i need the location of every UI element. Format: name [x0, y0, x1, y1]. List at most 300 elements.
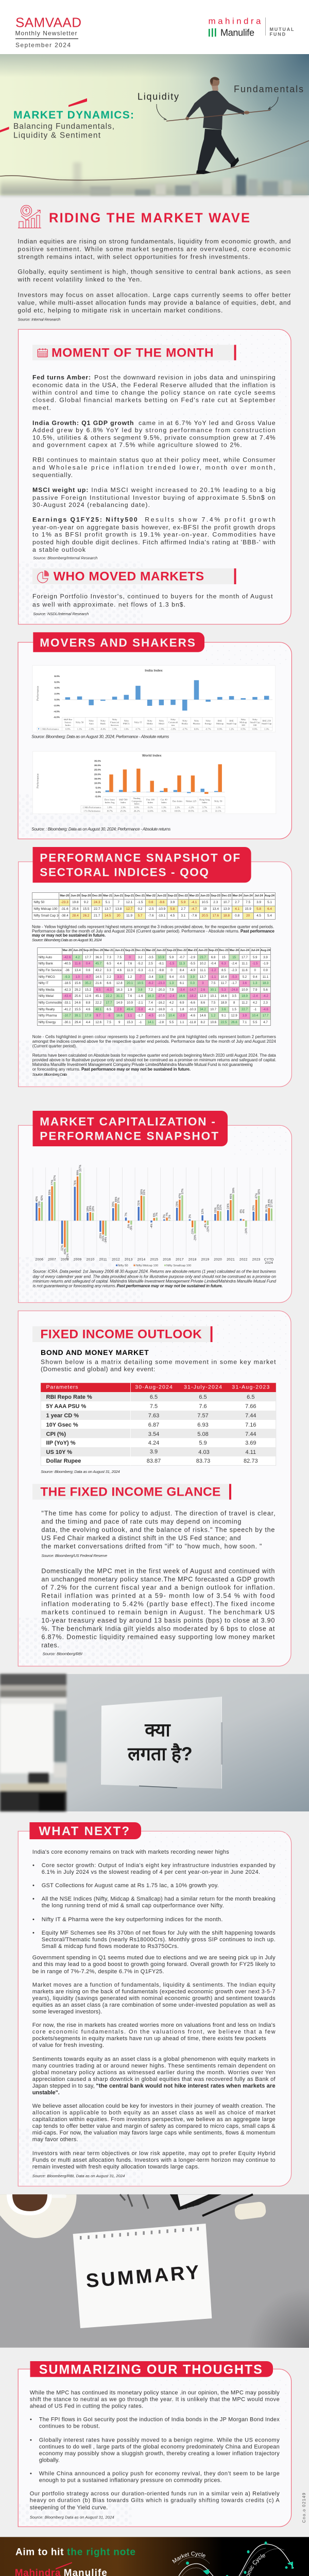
table: sectoral index quarterly returns: 1.3 — [253, 981, 257, 985]
table: sectoral index quarterly returns: Nifty IT — [39, 981, 48, 985]
table: sectoral index quarterly returns: -42.3 — [63, 988, 71, 992]
table: sectoral index quarterly returns: Nifty Auto — [39, 956, 52, 959]
data table: India Index: -1.9% — [89, 727, 94, 731]
table: nifty 50, midcap and smallcap quarterly returns: 2.7 — [235, 901, 239, 904]
bar chart: yearly returns by market cap: -31% — [102, 1235, 105, 1242]
table: nifty 50, midcap and smallcap quarterly returns: Nifty Midcap 100 — [33, 907, 57, 911]
value labels: 77% — [51, 1180, 54, 1185]
table: nifty 50, midcap and smallcap quarterly returns: Sep-20 — [81, 894, 91, 897]
text: india core economy bullets: • — [32, 1917, 35, 1923]
table: nifty 50, midcap and smallcap quarterly returns: Jun-21 — [114, 894, 123, 897]
tab heading: movers and shakers — [33, 632, 204, 652]
table: sectoral index quarterly returns: 5.3 — [221, 988, 226, 992]
table: sectoral index quarterly returns: -18.2 — [189, 994, 196, 998]
icon: pie chart — [38, 570, 49, 583]
table: nifty 50, midcap and smallcap quarterly returns: Jun-24 — [244, 894, 253, 897]
data table: India Index: Nifty — [89, 719, 94, 722]
data table: World Index: Ftse 100 — [146, 799, 155, 801]
table: sectoral index quarterly returns: -3.4 — [179, 988, 185, 992]
year axis: 2012 — [112, 1258, 120, 1262]
year axis: 2010 — [86, 1258, 94, 1262]
legend — [116, 1264, 191, 1267]
value labels: 59% — [232, 1188, 235, 1193]
table: nifty 50, midcap and smallcap quarterly returns: Dec-22 — [179, 894, 188, 897]
table: nifty 50, midcap and smallcap quarterly returns: 7 — [117, 901, 119, 904]
data table: World Index: 0.1% — [148, 806, 153, 808]
panel: performance snapshot of sectoral indices — [19, 847, 291, 1087]
bar chart: yearly returns by market cap: -15% — [192, 1228, 195, 1235]
data table: India Index: 1.2% — [229, 727, 234, 731]
value labels: 40% — [36, 1196, 39, 1202]
table: sectoral index quarterly returns: -5.3 — [138, 969, 143, 972]
table: nifty 50, midcap and smallcap quarterly returns: Mar-24 — [233, 894, 242, 897]
text: domestic MPC commentary: of 7.2% for the current fiscal year and a benign outlook for inflation. — [41, 1584, 275, 1591]
text: market overview: strength remains intact, with select opportunities for fresh investments. — [18, 253, 250, 261]
year axis: 2022 — [239, 1258, 248, 1262]
text: MPC opinion: While the MPC has continued its monetary policy stance .in our opinion, the MPC may possibly — [30, 2389, 280, 2396]
text: investor guidance — [32, 2150, 276, 2178]
table: sectoral index quarterly returns: -5.5 — [190, 962, 195, 965]
value labels: 24% — [227, 1204, 230, 1209]
table: sectoral index quarterly returns: 3.3 — [117, 975, 122, 979]
table: sectoral index quarterly returns: 2.6 — [201, 988, 205, 992]
bar chart: yearly returns by market cap: -4% — [150, 1224, 153, 1228]
text: market moves: Market moves are a function of fundamentals, liquidity & sentiments. The Indian equity — [32, 1982, 276, 1988]
table: sectoral index quarterly returns: 3.6 — [243, 981, 247, 985]
text: valuations: pockets/segments in equity markets have run up ahead of time, there exists few pockets — [32, 2036, 266, 2042]
note: yellow highlighted cells: may or may not be sustained in future. — [32, 933, 106, 938]
table: sectoral index quarterly returns: -41.2 — [63, 1008, 71, 1011]
value labels: 18% — [87, 1206, 90, 1212]
data table: India Index: Media — [147, 722, 153, 725]
table: sectoral index quarterly returns: 3.2 — [138, 956, 143, 959]
table: sectoral index quarterly returns: 18.9 — [220, 1001, 227, 1005]
table: sectoral index quarterly returns: 16.6 — [220, 994, 227, 998]
table: nifty 50, midcap and smallcap quarterly returns: 4.5 — [256, 914, 261, 918]
text: fed chair quote: and the timing and pace of rate cuts may depend on incoming — [41, 1518, 241, 1526]
text: foreign portfolio investors: Foreign Portfolio Investor's, continued to buyers for the month of August — [32, 593, 273, 600]
tab heading: what next: WHAT NEXT? — [39, 1824, 129, 1838]
data table: World Index: 12.6% — [147, 809, 153, 812]
table: nifty 50, midcap and smallcap quarterly returns: 13.9 — [223, 907, 230, 911]
value labels: 4% — [239, 1209, 243, 1213]
text: market moves: some leveraged investors). — [32, 2009, 102, 2015]
text: market overview: gold etc, helping to mitigate risk in uncertain market conditions. — [18, 307, 222, 314]
table: sectoral index quarterly returns: 12.6 — [85, 994, 91, 998]
value labels: 47% — [179, 1193, 182, 1199]
table: sectoral index quarterly returns: Nifty Bank — [39, 962, 53, 965]
table: sectoral index quarterly returns: Nifty Energy — [39, 1021, 56, 1024]
data table: India Index: Nifty 50 — [76, 721, 84, 723]
hero subtitle — [13, 122, 114, 140]
table: key market parameters: 5.9 — [199, 1440, 207, 1446]
bar chart: yearly returns by market cap: -29% — [194, 1234, 197, 1241]
note: green and pink cells: Past performance may or may not be sustained in future. — [81, 1067, 191, 1072]
table: sectoral index quarterly returns: 5.9 — [253, 956, 257, 959]
table: nifty 50, midcap and smallcap quarterly returns: 4.1 — [235, 907, 239, 911]
table: nifty 50, midcap and smallcap quarterly returns: 4.5 — [170, 914, 175, 918]
table: sectoral index quarterly returns: 6.3 — [221, 962, 226, 965]
data table: India Index: Services — [111, 724, 119, 726]
text: india growth: India Growth: Q1 GDP growth — [32, 419, 134, 427]
note: green and pink cells — [32, 1035, 276, 1077]
icon: calendar — [38, 348, 47, 357]
bar chart: World Index: 15.0% — [94, 777, 101, 780]
legend: Nifty Smallcap 100 — [166, 1264, 191, 1267]
table: nifty 50, midcap and smallcap quarterly returns: 26.2 — [83, 914, 90, 918]
value labels: 20% — [252, 1205, 255, 1211]
table: sectoral index quarterly returns: 9.4 — [169, 975, 174, 979]
value labels: 3% — [163, 1214, 166, 1218]
table: sectoral index quarterly returns: 5.5 — [169, 1021, 174, 1024]
table: sectoral index quarterly returns: 6.6 — [107, 981, 111, 985]
text: RBI: RBI continues to maintain status quo at their policy meet, while Consumer — [32, 456, 276, 464]
table: nifty 50, midcap and smallcap quarterly returns: Dec-21 — [135, 894, 145, 897]
table: sectoral index quarterly returns: -42.6 — [63, 956, 71, 959]
text: earnings: Results show 7.4% profit growth — [145, 516, 276, 523]
table: sectoral index quarterly returns: 10.4 — [252, 1014, 258, 1018]
text: market overview: Globally, equity sentiment is high, though sensitive to central bank actions, as seen — [18, 268, 290, 276]
table: sectoral index quarterly returns: 18.3 — [263, 981, 268, 985]
value labels: 15% — [214, 1207, 217, 1213]
data table: India Index: Pharma — [193, 722, 200, 725]
data table: India Index: Financial — [110, 721, 119, 723]
table: sectoral index quarterly returns: 22.2 — [95, 1001, 101, 1005]
table: nifty 50, midcap and smallcap quarterly returns: 20 — [117, 914, 121, 918]
table: sectoral index quarterly returns: -0.4 — [211, 962, 216, 965]
sign text: क्या — [144, 1719, 171, 1740]
table: nifty 50, midcap and smallcap quarterly returns: 2.3 — [213, 901, 218, 904]
data table: India Index: -2.1% — [147, 727, 152, 731]
table: key market parameters: 7.5 — [150, 1403, 158, 1410]
table: sectoral index quarterly returns: 8 — [233, 1001, 235, 1005]
text: market moves: markets are rising on the back of fundamentals (expected economic growth over next 3-5-7 — [32, 1989, 276, 1995]
data table: World Index: Dax Index — [173, 800, 183, 802]
text: fed turns amber: Post the downward revision in jobs data and uninspiring — [94, 374, 276, 381]
bar chart: yearly returns by market cap: -60% — [64, 1248, 67, 1255]
table: sectoral index quarterly returns: 3.5 — [232, 994, 236, 998]
text: india core economy bullets: All the NSE Indices (Nifty, Midcap & Smallcap) had a similar return for the month breaking — [42, 1896, 276, 1902]
source note: day of every calendrer year end. The data provided above is for illustrative purpose only and should not be construed as a promise on — [33, 1275, 276, 1279]
value labels: 46% — [230, 1193, 233, 1199]
data table: India Index: Midcap — [216, 722, 224, 725]
panel: fixed income outlook — [18, 1311, 291, 1666]
text: asset allocation: mid-caps. For now, the valuation may favors large caps while sentiments, flows & momentum — [32, 2130, 276, 2136]
legend: Nifty 50 — [118, 1264, 128, 1267]
table: sectoral index quarterly returns: 17.7 — [242, 956, 248, 959]
source note: Past performance may or may not be sustained in future. — [117, 1284, 222, 1289]
table: sectoral index quarterly returns: Jul-24 — [251, 949, 259, 952]
text: asset allocation: cap tends to offer better value and margin of safety as compared to micro caps, small caps & — [32, 2123, 276, 2129]
table: key market parameters: 3.9 — [150, 1449, 158, 1455]
table: sectoral index quarterly returns: 3 — [202, 981, 204, 985]
table: nifty 50, midcap and smallcap quarterly returns: 7.5 — [246, 901, 250, 904]
table: nifty 50, midcap and smallcap quarterly returns: -9.6 — [159, 901, 164, 904]
text: domestic MPC commentary: an unchanged monetary policy stance.The MPC forecasted a GDP growth — [41, 1576, 274, 1583]
panel: what next — [18, 1822, 291, 2186]
data table: India Index: Nifty — [252, 718, 258, 721]
text: market moves: equities as an asset class (a rare combination of some under-invested population as well as — [32, 2002, 276, 2008]
table: sectoral index quarterly returns: 11.1 — [200, 969, 206, 972]
table: key market parameters: 4.24 — [148, 1440, 159, 1446]
table: sectoral index quarterly returns: 7.5 — [211, 981, 215, 985]
table: key market parameters: 3.54 — [148, 1431, 159, 1437]
table: nifty 50, midcap and smallcap quarterly returns: 2.7 — [181, 907, 185, 911]
table: sectoral index quarterly returns: -1 — [170, 1008, 173, 1011]
table: sectoral index quarterly returns: 1.2 — [211, 1014, 215, 1018]
table: sectoral index quarterly returns: Jun-22 — [157, 949, 166, 952]
table: sectoral index quarterly returns: 7.9 — [253, 988, 257, 992]
table: sectoral index quarterly returns: -24.8 — [231, 988, 238, 992]
table: sectoral index quarterly returns: 1.0 — [75, 975, 80, 979]
table: sectoral index quarterly returns: -1.1 — [148, 969, 153, 972]
table: nifty 50, midcap and smallcap quarterly returns: 3.9 — [256, 901, 261, 904]
table: sectoral index quarterly returns: 17.9 — [85, 1014, 91, 1018]
table: nifty 50, midcap and smallcap quarterly returns: 24.3 — [94, 901, 100, 904]
table: sectoral index quarterly returns: -9.3 — [64, 975, 70, 979]
text: fed turns amber: within control and time to change the policy stance on rate cycle seems — [32, 389, 276, 396]
text: fed turns amber: meet. — [32, 404, 51, 412]
bar chart: World Index: 0.0% — [96, 791, 101, 793]
year axis: 2016 — [163, 1258, 171, 1262]
table: sectoral index quarterly returns: 34.2 — [200, 1008, 206, 1011]
table: nifty 50, midcap and smallcap quarterly returns: 13.4 — [212, 907, 219, 911]
table: sectoral index quarterly returns: 11.6 — [242, 969, 248, 972]
heading: the fixed income glance: THE FIXED INCOME GLANCE — [40, 1485, 220, 1499]
hero subtitle: Liquidity & Sentiment — [13, 131, 101, 140]
text: foreign portfolio investors: Source: NSDL/Internal Research — [33, 612, 89, 616]
table: nifty 50, midcap and smallcap quarterly returns: 5.7 — [138, 914, 142, 918]
table: sectoral index quarterly returns: 8.2 — [201, 1021, 205, 1024]
title: SAMVAAD: SAMVAAD — [15, 14, 81, 30]
heading: Riding the market wave: RIDING THE MARKET WAVE — [49, 211, 250, 226]
bar chart: World Index: 5.0% — [96, 786, 101, 789]
table: key market parameters: 6.5 — [247, 1394, 254, 1400]
table: key market parameters: 6.5 — [150, 1394, 158, 1400]
table: sectoral index quarterly returns: 12.6 — [95, 1021, 101, 1024]
text: matrix intro: (Domestic and global) and key event: — [41, 1365, 155, 1372]
table: nifty 50, midcap and smallcap quarterly returns: 5.1 — [106, 901, 110, 904]
text: MSCI weight up: 30-August 2024 (rebalancing date). — [32, 501, 150, 509]
arrow: Liquidity — [157, 104, 166, 120]
headline: Aim to hit — [15, 2547, 64, 2557]
notepad page — [73, 2224, 212, 2328]
table: nifty 50, midcap and smallcap quarterly returns: 5.8 — [170, 907, 175, 911]
logo: Mahindra Manulife Mutual Fund: Manulife — [220, 27, 254, 38]
table: sectoral index quarterly returns: 21.6 — [95, 981, 101, 985]
data table: World Index: 26.2% — [134, 809, 140, 812]
table: nifty 50, midcap and smallcap quarterly returns: 17.6 — [212, 914, 219, 918]
text: sentiments: Japan stepped in to say, — [32, 2083, 95, 2089]
value labels: 31% — [138, 1200, 141, 1206]
panel: movers and shakers — [18, 632, 291, 839]
data table: India Index: BSE — [218, 719, 222, 722]
bar chart: yearly returns by market cap: -4% — [204, 1224, 207, 1228]
table: sectoral index quarterly returns: Mar-20 — [62, 949, 72, 952]
text: foreign portfolio investors: as well with approximate. net flows of 1.3 bn$. — [32, 601, 185, 608]
spiral notebook — [170, 2194, 221, 2210]
data table: India Index: 1.6% — [124, 727, 129, 731]
table: nifty 50, midcap and smallcap quarterly returns: 5.4 — [267, 914, 272, 918]
table: key market parameters: 83.73 — [196, 1458, 210, 1464]
value labels: 19% — [89, 1206, 92, 1211]
table: sectoral index quarterly returns: 0.3 — [190, 981, 195, 985]
text: india growth: Added grew by 6.8% YoY led by strong performance from construction — [32, 427, 276, 434]
table: sectoral index quarterly returns: -18.5 — [63, 981, 71, 985]
table: sectoral index quarterly returns: -11.8 — [189, 1021, 196, 1024]
table: sectoral index quarterly returns: 14.1 — [148, 1021, 153, 1024]
table: nifty 50, midcap and smallcap quarterly returns: -1.5 — [138, 901, 143, 904]
source note: minimum returns and safeguard of capital. Mahindra Manulife Investment Management Private Limited/Mahindra Manulife Mutual Fund — [33, 1279, 276, 1284]
value labels: 12% — [201, 1209, 204, 1214]
table: sectoral index quarterly returns: -40.5 — [63, 962, 71, 965]
data table: World Index: 18.5% — [188, 809, 194, 812]
table: nifty 50, midcap and smallcap quarterly returns: Dec-20 — [92, 894, 101, 897]
table: sectoral index quarterly returns: -1 — [139, 1021, 142, 1024]
text: india core economy bullets: 6.1% in July 2024 vs the slowest reading of 4 per cent year-on-year in June 2024. — [42, 1869, 260, 1875]
text: investor guidance: Source: Bloomberg/RBI, Data as on August 31, 2024 — [32, 2174, 125, 2178]
text: domestic MPC commentary: markets continued to remain benign in August. The benchmark US — [41, 1609, 274, 1616]
text: asset allocation: allocation is applicable to both equity as an asset class as well as choice of market — [32, 2110, 276, 2116]
legend: Nifty Midcap 100 — [136, 1264, 158, 1267]
year axis: 2014 — [138, 1258, 145, 1262]
table: sectoral index quarterly returns: -1.7 — [138, 1014, 143, 1018]
table: sectoral index quarterly returns: -5.2 — [138, 962, 143, 965]
table: nifty 50, midcap and smallcap quarterly returns: 25.6 — [72, 907, 79, 911]
table: key market parameters: Dollar Rupee — [46, 1458, 81, 1464]
curved label: Market Cycle: Market Cycle — [172, 2551, 205, 2564]
table: nifty 50, midcap and smallcap quarterly returns: Sep-22 — [168, 894, 177, 897]
year axis: 2021 — [227, 1258, 235, 1262]
data table: World Index: Composite — [132, 800, 142, 802]
data table: World Index: Index — [161, 801, 167, 804]
note: green and pink cells: or forecasting any returns. — [32, 1067, 80, 1072]
table: sectoral index quarterly returns: 12.9 — [200, 994, 206, 998]
bar chart: World Index: 30.0% — [94, 764, 101, 767]
source note: Source: Bloomberg; Data as on August 30, 2024; Performance - Absolute returns — [31, 735, 169, 739]
text: MSCI weight up: India MSCI weight increased to 20.1% leading to a big — [91, 486, 276, 494]
table: sectoral index quarterly returns: 7.9 — [169, 988, 174, 992]
logo: Mahindra Manulife Mutual Fund — [208, 16, 294, 38]
source note: Source: ICRA. Data period: 1st January 2006 till 30 August 2024. Returns are absolute returns (1 year) calculated as of the last business — [33, 1269, 276, 1274]
panel: market capitalization performance snapshot — [19, 1111, 291, 1302]
data table: India Index: Energy — [205, 722, 212, 725]
table: sectoral index quarterly returns: -10.5 — [158, 1014, 165, 1018]
table: nifty 50, midcap and smallcap quarterly returns: 18.8 — [223, 914, 230, 918]
table: sectoral index quarterly returns: -1.6 — [138, 994, 143, 998]
code: Cno 02149: Cno.o 02149 — [302, 2493, 306, 2523]
value labels: 21% — [219, 1205, 222, 1210]
data table: India Index: Realty — [182, 722, 188, 725]
data table: India Index: -1.9% — [159, 727, 164, 731]
table: nifty 50, midcap and smallcap quarterly returns: 9.2 — [84, 901, 89, 904]
table: sectoral index quarterly returns: 17.7 — [85, 956, 91, 959]
table: sectoral index quarterly returns: 2.3 — [263, 1001, 268, 1005]
note: yellow highlighted cells — [32, 924, 274, 942]
data table: World Index: Hang Seng — [199, 799, 210, 801]
table: sectoral index quarterly returns: 7.1 — [243, 1021, 247, 1024]
text: earnings: Earnings Q1FY25: Nifty500 — [32, 516, 138, 523]
data table: India Index: Nifty — [170, 718, 176, 721]
text: sentiments: many countries trading at or around newer highs. These sentiments remain dependent on — [32, 2063, 276, 2069]
table: sectoral index quarterly returns: 1.9 — [128, 988, 132, 992]
table: sectoral index quarterly returns: Dec-22 — [177, 949, 187, 952]
table: sectoral index quarterly returns: 12.9 — [231, 1014, 237, 1018]
value labels: 37% — [117, 1197, 121, 1203]
bar chart: India Index: 8.0% — [55, 675, 60, 677]
value labels: 99% — [77, 1170, 80, 1176]
data table: World Index: Nifty 50 — [214, 800, 222, 802]
year axis: CYTD — [264, 1258, 274, 1262]
text: earnings: to 1% as BFSI profit growth is 19.1% year-on-year. Commodities have — [32, 531, 276, 538]
value labels: 27.5% — [270, 1199, 273, 1208]
bar chart: yearly returns by market cap: -52% — [61, 1245, 64, 1251]
year axis: 2006 — [35, 1258, 43, 1262]
table: sectoral index quarterly returns: 5.5 — [253, 1021, 257, 1024]
table: sectoral index quarterly returns: 7.6 — [128, 994, 132, 998]
bar chart: yearly returns by market cap: -10% — [207, 1226, 210, 1233]
table: sectoral index quarterly returns: 9.1 — [221, 1014, 226, 1018]
table: sectoral index quarterly returns: -30.1 — [63, 1021, 71, 1024]
text: thoughts bullets: • — [30, 2470, 32, 2477]
table: nifty 50, midcap and smallcap quarterly returns: Jun-22 — [157, 894, 166, 897]
data table: India Index: Nifty — [205, 719, 211, 722]
table: sectoral index quarterly returns: 9.7 — [96, 1014, 100, 1018]
text: india core economy bullets: • — [32, 1883, 35, 1889]
value labels: 57% — [181, 1189, 184, 1194]
text: domestic MPC commentary: 6.87%. Domestic liquidity remained easy supporting low money market — [41, 1634, 275, 1641]
table: sectoral index quarterly returns: 6.5 — [107, 962, 111, 965]
table: sectoral index quarterly returns: 2.2 — [107, 975, 111, 979]
text: earnings: year-on-year on aggregate basis however, ex-BFSI the profit growth drops — [32, 524, 276, 531]
data table: India Index: 100 — [253, 724, 257, 726]
text: india core economy bullets: Nifty IT & Pharma were the key outperforming indices for the month. — [42, 1917, 222, 1923]
pencils — [120, 2194, 148, 2209]
table: nifty 50, midcap and smallcap quarterly returns: 5.9 — [181, 901, 185, 904]
heading: moment of the month: MOMENT OF THE MONTH — [52, 346, 214, 360]
table: sectoral index quarterly returns: -6.2 — [148, 981, 153, 985]
arrow: Fundamentals — [268, 97, 278, 109]
data table: India Index: FMCG — [123, 722, 130, 725]
data table: India Index: Nifty — [182, 719, 187, 722]
bar chart: India Index: 2.0% — [55, 692, 60, 695]
data table: World Index: Cac 40 — [161, 799, 167, 801]
text: india core economy bullets: Equity MF Schemes see Rs 370bn of net flows for July with the shift happening towards — [42, 1930, 276, 1936]
data table: India Index: -0.7% — [205, 727, 211, 731]
table: sectoral index quarterly returns: Mar-21 — [104, 949, 113, 952]
hero image: tightrope walker — [0, 54, 309, 195]
table: sectoral index quarterly returns: Sep-21 — [125, 949, 134, 952]
logo: Mahindra Manulife Mutual Fund: FUND — [270, 31, 286, 37]
table: sectoral index quarterly returns: 14.5 — [95, 975, 101, 979]
bar chart: yearly returns by market cap: -9% — [130, 1226, 133, 1231]
table: sectoral index quarterly returns: -5 — [108, 1014, 110, 1018]
heading: fixed income outlook: FIXED INCOME OUTLOOK — [40, 1328, 202, 1342]
table: sectoral index quarterly returns: 4.2 — [253, 1001, 257, 1005]
table: sectoral index quarterly returns: -1.5 — [252, 962, 258, 965]
issue date: September 2024 — [15, 42, 71, 49]
year axis: 2023 — [252, 1258, 261, 1262]
bar chart: World Index: 35.0% — [94, 759, 101, 762]
text: investor guidance: Investors with near term objectives or low risk appetite, may opt to prefer Equity Hybrid — [32, 2150, 276, 2157]
data table: World Index: 1.1% — [216, 806, 221, 808]
data table: India Index: Bank — [100, 722, 106, 725]
text: sentiments: global monetary policy actions as witnessed earlier during the month. Worries over Yen — [32, 2070, 276, 2076]
data table: World Index: S&P 500 — [119, 799, 128, 801]
table: sectoral index quarterly returns: -2.8 — [159, 1021, 164, 1024]
data table: India Index: Sensex — [64, 721, 72, 723]
year axis: 2013 — [125, 1258, 133, 1262]
